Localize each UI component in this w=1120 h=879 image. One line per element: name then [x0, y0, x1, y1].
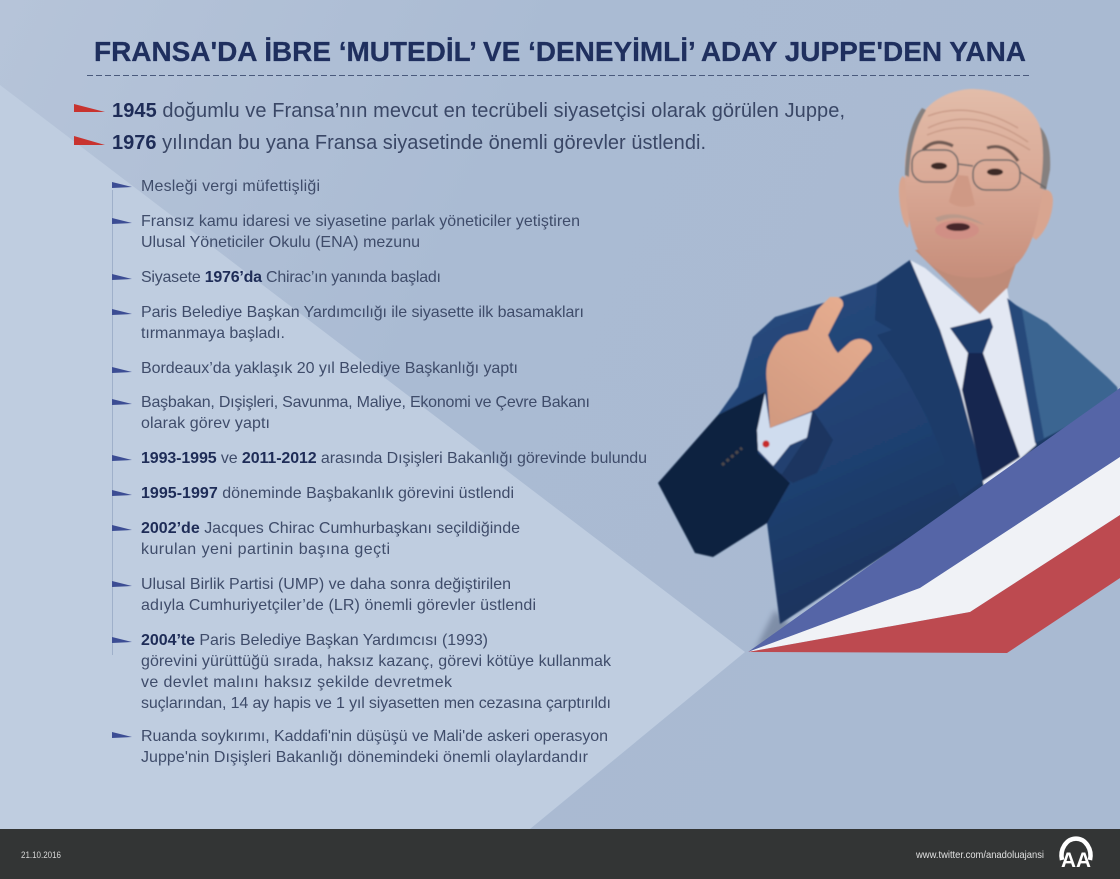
red stripe [748, 515, 1120, 653]
blue stripe [748, 388, 1120, 652]
item: Paris deputy mayor: Paris Belediye Başkan Yardımcılığı ile siyasette ilk basamakları [141, 304, 584, 321]
icon: AA logo [1061, 839, 1091, 872]
ears [899, 176, 1053, 240]
item: UMP: Ulusal Birlik Partisi (UMP) ve daha sonra değiştirilen [141, 576, 511, 593]
item: ministries: Başbakan, Dışişleri, Savunma, Maliye, Ekonomi ve Çevre Bakanı [141, 394, 590, 411]
portrait: Alain Juppe [658, 89, 1120, 624]
item: 2002: 2002’de Jacques Chirac Cumhurbaşkanı seçildiğinde [141, 520, 520, 537]
tie knot [950, 318, 993, 353]
item: Rwanda: Ruanda soykırımı, Kaddafi'nin düşüşü ve Mali'de askeri operasyon [141, 728, 608, 745]
item: profession: Mesleği vergi müfettişliği [141, 178, 320, 195]
item: 2004 [112, 632, 612, 712]
item: 2002: kurulan yeni partinin başına geçti [141, 541, 390, 558]
item: Rwanda: Juppe'nin Dışişleri Bakanlığı dönemindeki önemli olaylardandır [141, 749, 589, 766]
light triangular panel [0, 85, 745, 829]
moustache shadow [935, 214, 985, 225]
icon: red flag bullet [74, 136, 105, 145]
item: ministries: olarak görev yaptı [141, 415, 270, 432]
item: ENA: Ulusal Yöneticiler Okulu (ENA) mezunu [141, 234, 420, 251]
intro line 2: 1976 yılından bu yana Fransa siyasetinde önemli görevler üstlendi. [112, 132, 706, 154]
glasses [912, 150, 1046, 190]
item: 2004: görevini yürüttüğü sırada, haksız kazanç, görevi kötüye kullanmak [141, 653, 612, 670]
item: 2004: 2004’te Paris Belediye Başkan Yardımcısı (1993) [141, 632, 488, 649]
item: Rwanda [112, 728, 608, 766]
mouth [935, 220, 979, 240]
item: Bordeaux: Bordeaux’da yaklaşık 20 yıl Belediye Başkanlığı yaptı [141, 360, 518, 377]
sleeve buttons [722, 448, 742, 465]
upper arm and suit [718, 260, 1120, 624]
item: 2004: ve devlet malını haksız şekilde devretmek [141, 674, 453, 691]
left lapel [875, 260, 984, 497]
item: foreign minister: 1993-1995 ve 2011-2012 arasında Dışişleri Bakanlığı görevinde bulundu [141, 450, 647, 467]
item: ministries [112, 394, 590, 432]
item: prime minister: 1995-1997 döneminde Başbakanlık görevini üstlendi [141, 485, 514, 502]
intro lines [74, 100, 845, 154]
shirt [910, 260, 1036, 490]
cuff [757, 393, 812, 473]
item: ENA [112, 213, 580, 251]
forehead wrinkles [927, 110, 1030, 150]
item: 2004: suçlarından, 14 ay hapis ve 1 yıl siyasetten men cezasına çarptırıldı [141, 695, 611, 712]
forearm [658, 392, 790, 557]
icon: AA logo: AA [1061, 849, 1091, 872]
item: UMP: adıyla Cumhuriyetçiler’de (LR) önemli görevler üstlendi [141, 597, 536, 614]
flag shadow [755, 610, 795, 650]
French flag ribbon [748, 388, 1120, 653]
nose [949, 175, 975, 207]
item: Paris deputy mayor: tırmanmaya başladı. [141, 325, 285, 342]
twitter url: www.twitter.com/anadoluajansi [915, 850, 1044, 861]
eyes [931, 162, 947, 170]
jacket right side [1007, 300, 1120, 442]
hand [766, 297, 872, 428]
hair [905, 108, 1050, 190]
item: UMP [112, 576, 536, 614]
intro line 1: 1945 doğumlu ve Fransa’nın mevcut en tecrübeli siyasetçisi olarak görülen Juppe, [112, 100, 845, 122]
right lapel [1007, 298, 1044, 443]
eyebrows [923, 142, 1018, 161]
neck [915, 240, 1024, 314]
item: Paris deputy mayor [112, 304, 584, 342]
date: 21.10.2016 [21, 850, 61, 861]
item: 2002 [112, 520, 520, 558]
footer bar [0, 829, 1120, 879]
tie [950, 318, 1020, 481]
item: 1976: Siyasete 1976’da Chirac’ın yanında başladı [141, 269, 441, 286]
item: ENA: Fransız kamu idaresi ve siyasetine parlak yöneticiler yetiştiren [141, 213, 580, 230]
head [905, 89, 1045, 278]
career list [112, 178, 647, 766]
sleeve fold [770, 410, 833, 483]
title: FRANSA'DA İBRE ‘MUTEDİL’ VE ‘DENEYİMLİ’ ADAY JUPPE'DEN YANA [94, 36, 1026, 67]
icon: red flag bullet [74, 104, 105, 112]
white stripe [748, 457, 1120, 652]
